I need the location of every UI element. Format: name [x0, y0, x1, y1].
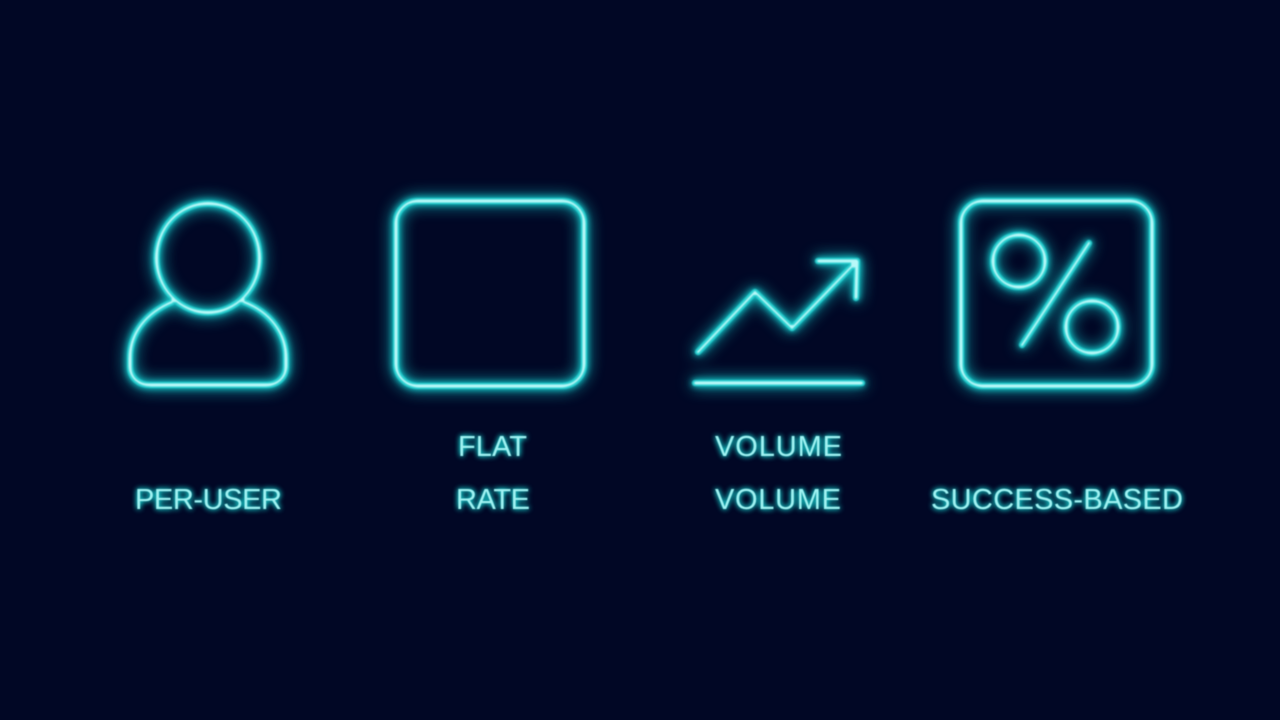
- percent slash: [1022, 243, 1089, 345]
- icon: percent in square: [961, 201, 1152, 386]
- percent lower circle: [1066, 301, 1118, 353]
- icon: rising volume chart: [695, 261, 862, 383]
- percent frame: [961, 201, 1152, 386]
- label: volume bottom: VOLUME: [715, 484, 841, 516]
- label: rate: RATE: [456, 484, 530, 516]
- arrow head: [818, 261, 857, 298]
- label: volume top: VOLUME: [715, 431, 842, 463]
- label: flat: FLAT: [458, 431, 527, 463]
- label: success-based: SUCCESS-BASED: [931, 484, 1183, 516]
- percent upper circle: [993, 235, 1045, 287]
- icon: flat rate square: [396, 201, 584, 386]
- chart baseline: [695, 380, 862, 386]
- trend line: [698, 261, 857, 352]
- icon: person: [130, 204, 286, 385]
- person head: [156, 204, 260, 312]
- label: per-user: PER-USER: [135, 484, 282, 516]
- person body: [130, 302, 286, 385]
